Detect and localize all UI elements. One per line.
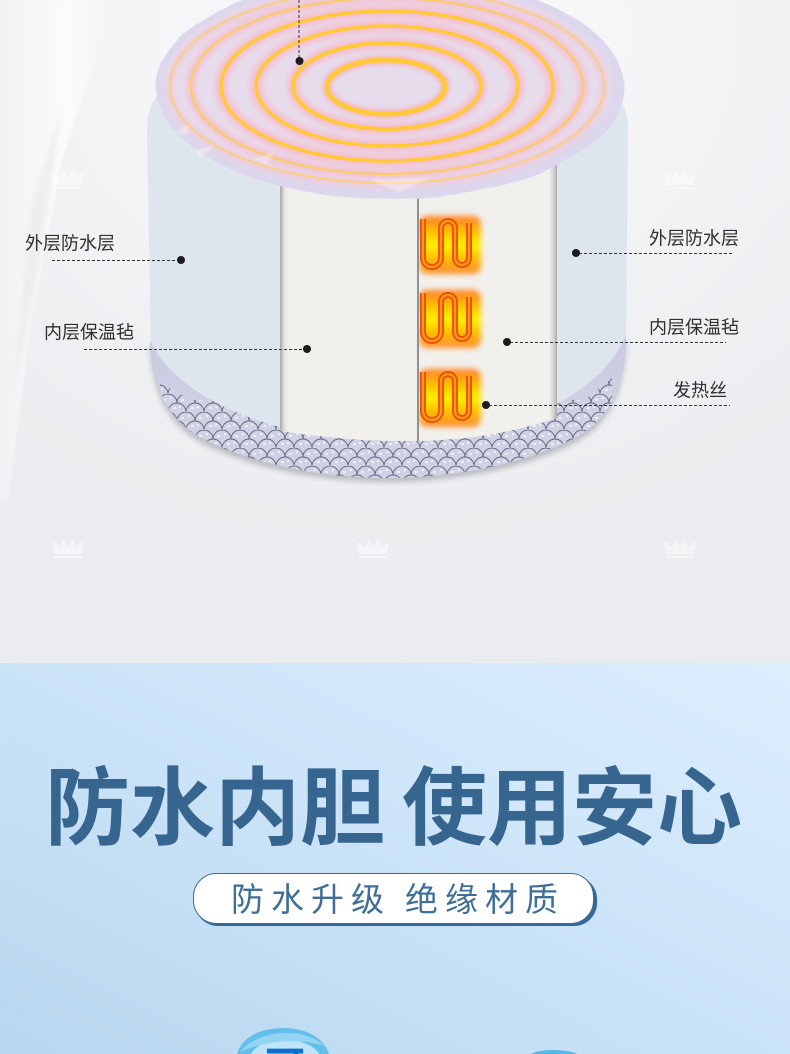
callout: heating wire <box>482 380 730 409</box>
main heading: 使用安心 <box>402 762 742 857</box>
callout: left inner insulation felt: 内层保温毡 <box>44 322 134 342</box>
callout: left outer waterproof layer <box>25 234 185 264</box>
coil 1 <box>419 216 481 274</box>
panel divider shadow <box>417 190 419 441</box>
main heading: 防水内胆 <box>45 762 385 857</box>
disc highlights <box>175 124 430 192</box>
callout: left outer waterproof layer: 外层防水层 <box>25 234 115 254</box>
water bubble icon: right, cropped <box>531 1050 577 1054</box>
subtitle pill: 防水升级 <box>231 881 391 918</box>
water bubble icon: left, cropped <box>237 1028 329 1054</box>
heating rings <box>170 0 604 183</box>
callout: right outer waterproof layer <box>572 228 739 257</box>
ground shadow under tank <box>150 340 626 482</box>
callout: right outer waterproof layer: 外层防水层 <box>649 228 739 248</box>
top disc with heating rings <box>156 0 624 199</box>
inner insulation felt panel right <box>419 160 557 441</box>
coil 2 <box>419 290 481 348</box>
main heading <box>45 762 742 857</box>
top pointer line and dot <box>296 0 304 65</box>
coil 3 <box>419 369 481 427</box>
subtitle pill <box>194 874 597 926</box>
heating wire coils <box>419 216 481 427</box>
background: upper light section <box>0 0 790 663</box>
background: lower blue section <box>0 663 790 1054</box>
watermark crowns <box>52 170 696 558</box>
callout: heating wire: 发热丝 <box>673 380 727 400</box>
callout: left inner insulation felt <box>44 322 311 353</box>
curtain at left <box>0 0 112 500</box>
outer waterproof layer body <box>147 70 628 441</box>
product: cross-section of inner tank <box>147 0 628 500</box>
inner insulation felt panel left <box>280 160 417 441</box>
subtitle pill: 绝缘材质 <box>405 881 565 918</box>
scale textured base band <box>150 336 626 478</box>
callout: right inner insulation felt <box>503 318 739 346</box>
callout: right inner insulation felt: 内层保温毡 <box>649 318 739 338</box>
